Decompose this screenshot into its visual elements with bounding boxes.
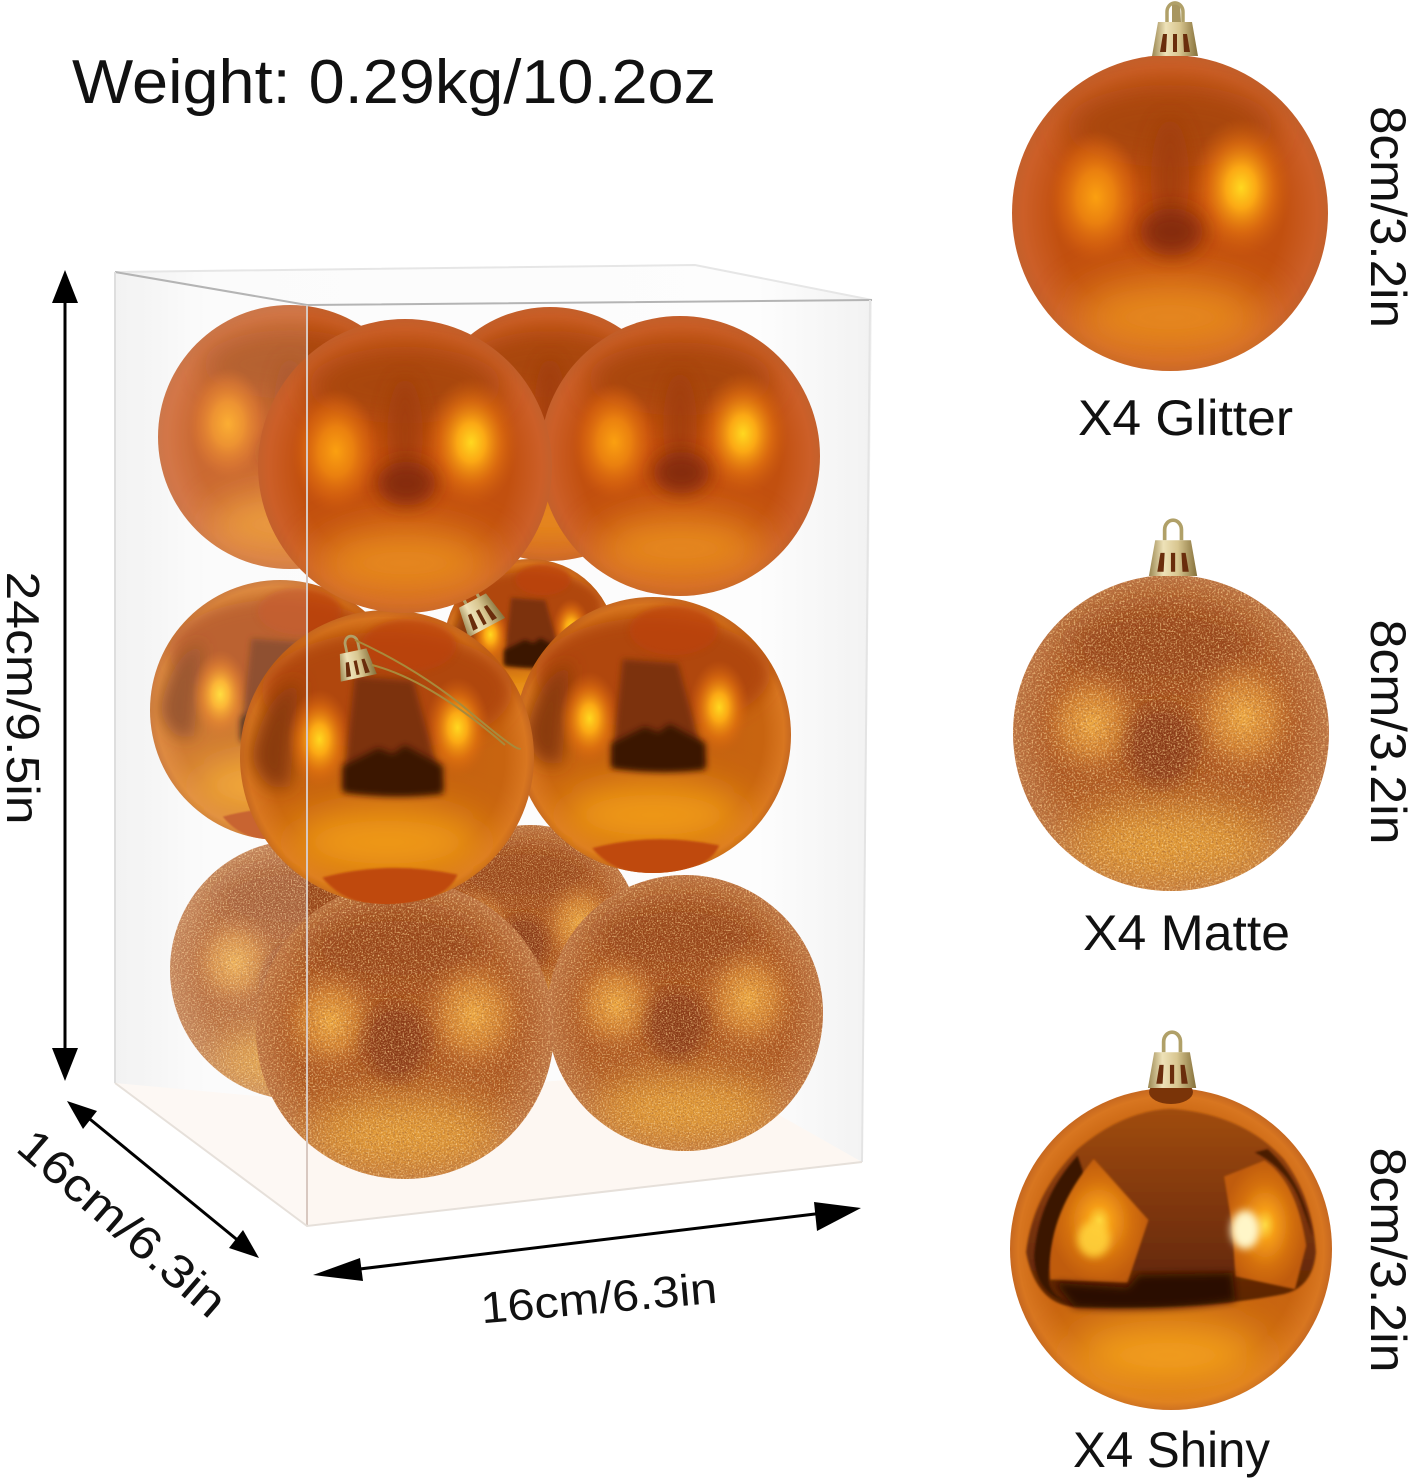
box floor reflection bbox=[115, 1070, 862, 1226]
panel: matte-finish ornament labelled glitter bbox=[1012, 3, 1412, 446]
ornament bbox=[1013, 520, 1329, 891]
caption: X4 Shiny bbox=[1073, 1422, 1270, 1478]
label: depth: 16cm/6.3in bbox=[8, 1118, 237, 1328]
arrow: height bbox=[52, 270, 78, 1081]
arrow: depth bbox=[67, 1101, 259, 1258]
label: width: 16cm/6.3in bbox=[479, 1264, 719, 1333]
ornament bbox=[1010, 1032, 1332, 1410]
gold hanging cord bbox=[355, 640, 520, 749]
arrow: width bbox=[313, 1202, 861, 1281]
caption: X4 Matte bbox=[1083, 905, 1290, 961]
ornament bbox=[1012, 3, 1328, 371]
front row: matte ornaments bbox=[258, 316, 820, 613]
back row ornaments bbox=[115, 272, 677, 1226]
title: weight: Weight: 0.29kg/10.2oz bbox=[72, 48, 716, 117]
front row: shiny ornaments bbox=[240, 576, 791, 907]
box with ornaments bbox=[115, 265, 872, 1226]
panel: shiny ornament bbox=[1010, 1032, 1412, 1478]
box back faces bbox=[115, 265, 872, 1226]
front row: glitter ornaments bbox=[256, 875, 823, 1179]
panel: glitter-finish ornament labelled matte bbox=[1013, 520, 1412, 961]
caption: X4 Glitter bbox=[1078, 390, 1293, 446]
box edges bbox=[115, 265, 872, 1226]
